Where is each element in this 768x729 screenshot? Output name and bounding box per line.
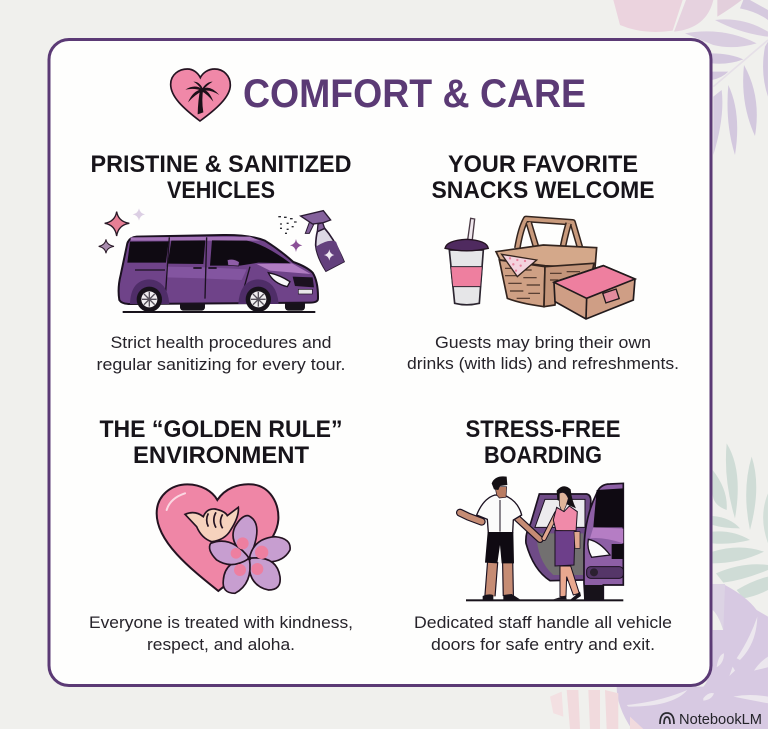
description: Guests may bring their own bbox=[435, 333, 651, 352]
title group bbox=[171, 69, 586, 121]
description: Dedicated staff handle all vehicle bbox=[414, 613, 672, 632]
heading: BOARDING bbox=[484, 442, 602, 469]
panel: main card bbox=[49, 40, 711, 686]
description bbox=[414, 613, 672, 654]
background leaves: top right bbox=[613, 0, 768, 155]
heading: ENVIRONMENT bbox=[133, 442, 309, 469]
icon: drink cup, picnic basket and lunch box bbox=[445, 218, 635, 319]
heading: SNACKS WELCOME bbox=[432, 177, 654, 204]
description: doors for safe entry and exit. bbox=[431, 635, 655, 654]
title: COMFORT & CARE bbox=[243, 72, 586, 116]
description: Strict health procedures and bbox=[110, 333, 332, 352]
description: regular sanitizing for every tour. bbox=[96, 355, 346, 374]
background leaves: bottom right bbox=[550, 443, 768, 729]
panel: pristine and sanitized vehicles bbox=[90, 151, 352, 374]
NotebookLM watermark bbox=[660, 712, 762, 728]
description: drinks (with lids) and refreshments. bbox=[407, 354, 679, 373]
panel: golden rule environment bbox=[89, 416, 353, 654]
description bbox=[89, 613, 353, 654]
heading bbox=[432, 151, 654, 204]
description bbox=[96, 333, 346, 374]
icon: purple van with sparkles and spray bottle bbox=[99, 208, 344, 313]
heading bbox=[100, 416, 342, 469]
heading: THE “GOLDEN RULE” bbox=[100, 416, 342, 443]
heading bbox=[466, 416, 620, 469]
panel: favorite snacks welcome bbox=[407, 151, 679, 373]
heading: PRISTINE & SANITIZED bbox=[90, 151, 352, 178]
description bbox=[407, 333, 679, 373]
heading bbox=[90, 151, 352, 204]
icon: heart with shaka hand and plumeria bbox=[157, 484, 290, 593]
watermark text: NotebookLM bbox=[679, 712, 762, 728]
icon: heart with palm tree bbox=[171, 69, 230, 121]
icon: NotebookLM logo bbox=[660, 713, 674, 724]
panel: stress-free boarding bbox=[414, 416, 672, 654]
description: Everyone is treated with kindness, bbox=[89, 613, 353, 632]
heading: VEHICLES bbox=[167, 177, 275, 204]
description: respect, and aloha. bbox=[147, 635, 295, 654]
heading: YOUR FAVORITE bbox=[448, 151, 638, 178]
icon: staff member helping guest board a van bbox=[460, 476, 623, 601]
heading: STRESS-FREE bbox=[466, 416, 620, 443]
